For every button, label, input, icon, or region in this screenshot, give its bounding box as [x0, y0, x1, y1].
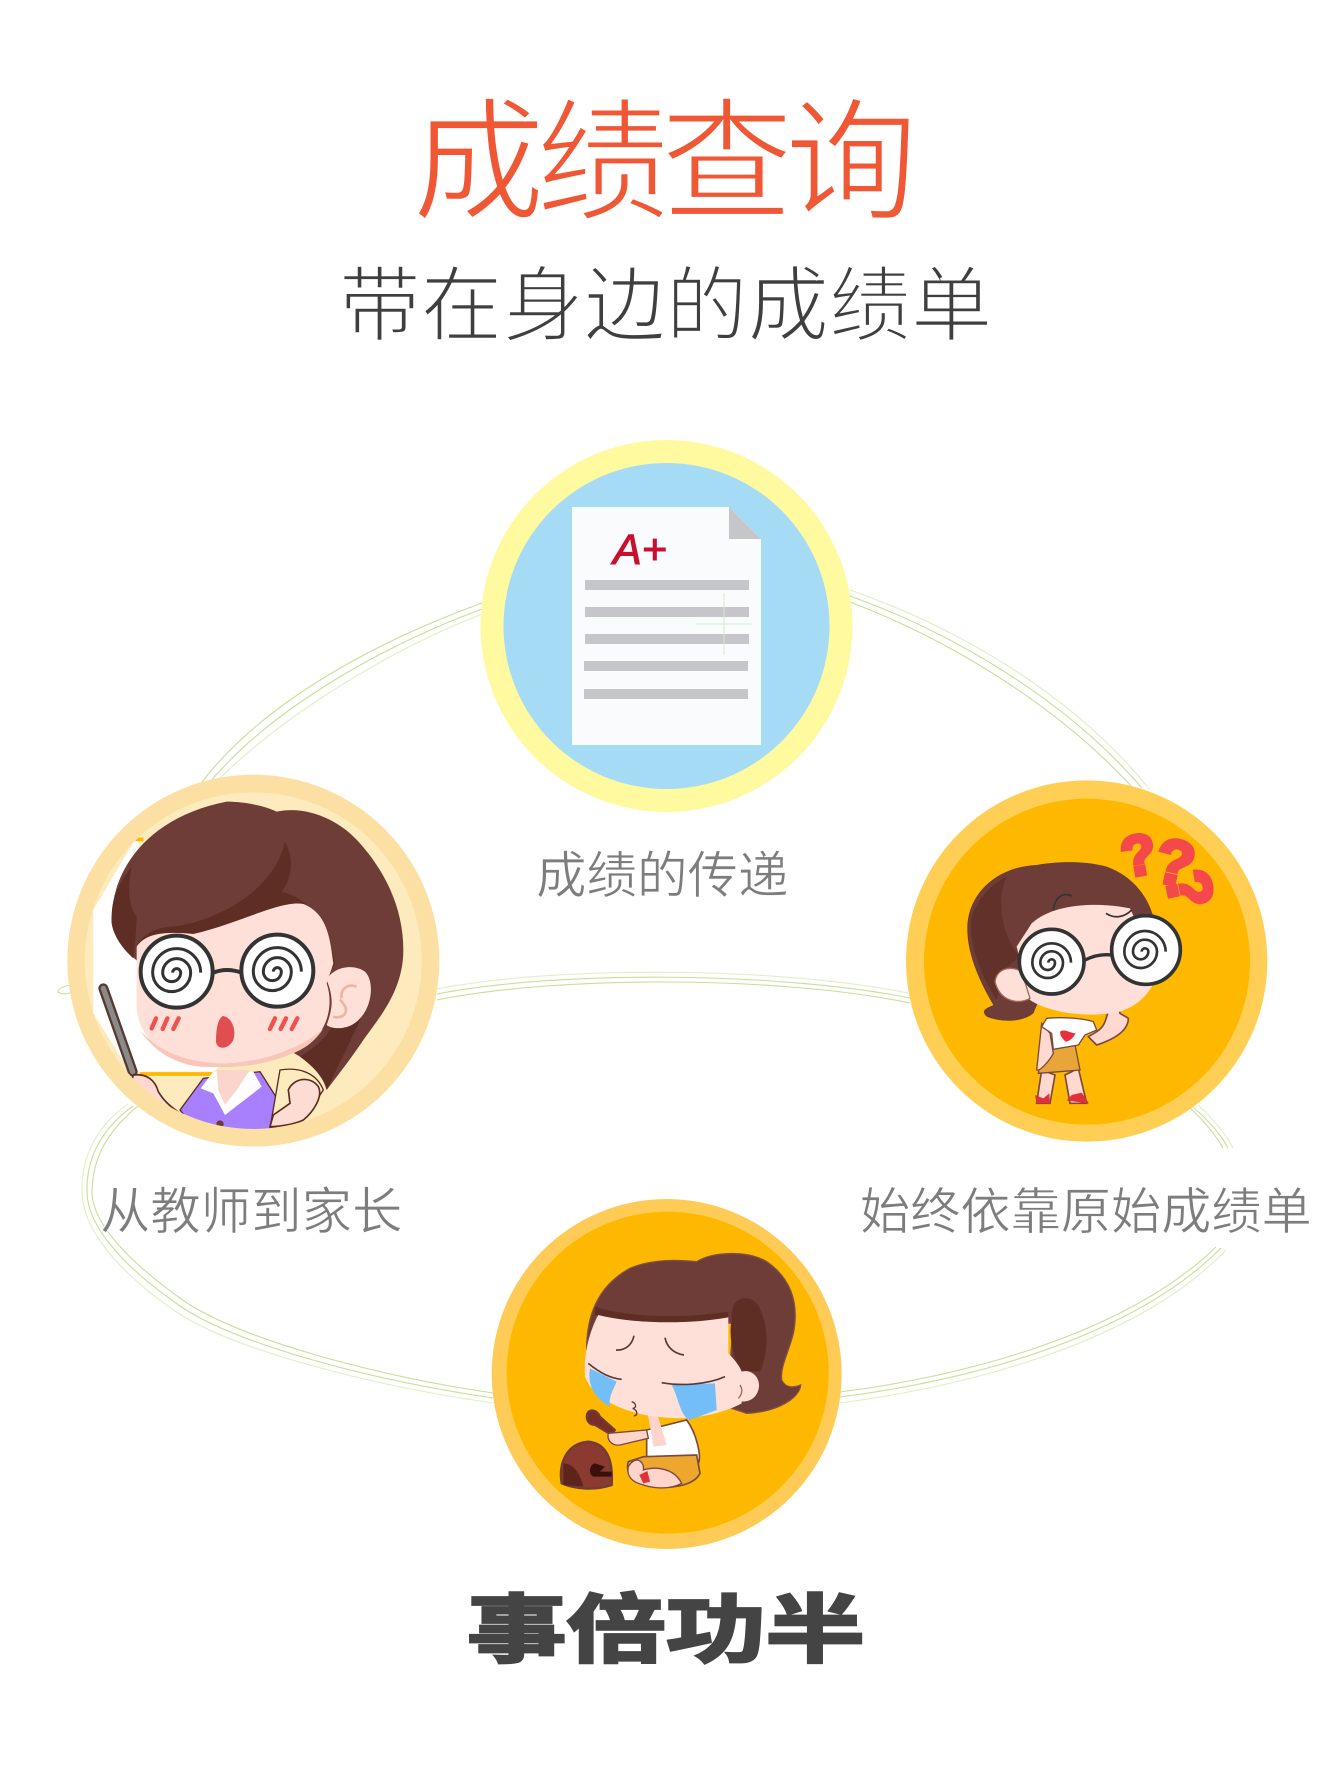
- subtitle: 带在身边的成绩单: [339, 261, 992, 352]
- hair: [967, 862, 1153, 1021]
- face: [137, 904, 333, 1067]
- hair: [111, 802, 403, 1090]
- label: left: 从教师到家长: [100, 1183, 402, 1240]
- label: right: 始终依靠原始成绩单: [860, 1184, 1312, 1240]
- legs and skirt: [1037, 1068, 1087, 1103]
- tears: [589, 1368, 617, 1407]
- hair: [587, 1254, 801, 1413]
- face: [1017, 905, 1157, 1015]
- conclusion: 事倍功半: [467, 1588, 865, 1672]
- question marks: ?: [1149, 825, 1201, 902]
- icon: paper with A+: A+: [610, 526, 667, 574]
- bottom circle: crying girl: [492, 1199, 842, 1549]
- pointer: [103, 988, 133, 1072]
- glasses: [141, 936, 213, 1008]
- icon: paper with A+: [572, 507, 761, 745]
- shirt and arm: [1037, 1023, 1053, 1070]
- wooden fish: [561, 1442, 612, 1489]
- blush and mouth: [152, 1018, 297, 1029]
- suit: [180, 1072, 283, 1130]
- eyes: [588, 1336, 725, 1384]
- top circle: report card: [480, 440, 852, 812]
- label: top: 成绩的传递: [536, 847, 788, 904]
- glasses: [1019, 929, 1084, 994]
- question marks: ?: [1116, 822, 1161, 890]
- title: 成绩查询: [412, 90, 911, 238]
- connecting curves: [58, 590, 1233, 1403]
- body: [647, 1420, 699, 1463]
- face: [585, 1315, 742, 1418]
- left circle: teacher: [67, 775, 439, 1147]
- question marks: ?: [1151, 864, 1227, 915]
- question marks: [1116, 822, 1227, 915]
- right circle: confused girl: [906, 780, 1267, 1142]
